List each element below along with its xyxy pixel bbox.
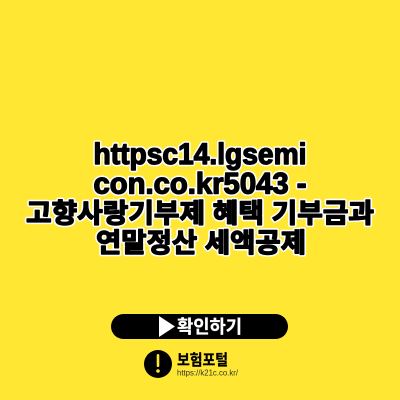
title xyxy=(26,138,374,258)
button: confirm xyxy=(111,314,288,339)
title: 고향사랑기부제 혜택 기부금과 xyxy=(26,198,374,228)
title: con.co.kr5043 - xyxy=(94,168,306,200)
title: httpsc14.lgsemi xyxy=(94,138,306,171)
icon: exclamation circle xyxy=(144,350,172,378)
title: httpsc14.lgsemi xyxy=(94,138,306,171)
title: 연말정산 세액공제 xyxy=(96,228,306,258)
icon: play triangle xyxy=(159,316,175,337)
logo url: https://k21c.co.kr/ xyxy=(177,368,239,378)
title: con.co.kr5043 - xyxy=(94,168,306,200)
logo: insurance portal xyxy=(144,350,239,378)
title: 연말정산 세액공제 xyxy=(96,228,306,258)
button label: 확인하기 xyxy=(177,317,242,337)
logo name: 보험포털 xyxy=(177,352,228,369)
title: 고향사랑기부제 혜택 기부금과 xyxy=(26,198,374,228)
